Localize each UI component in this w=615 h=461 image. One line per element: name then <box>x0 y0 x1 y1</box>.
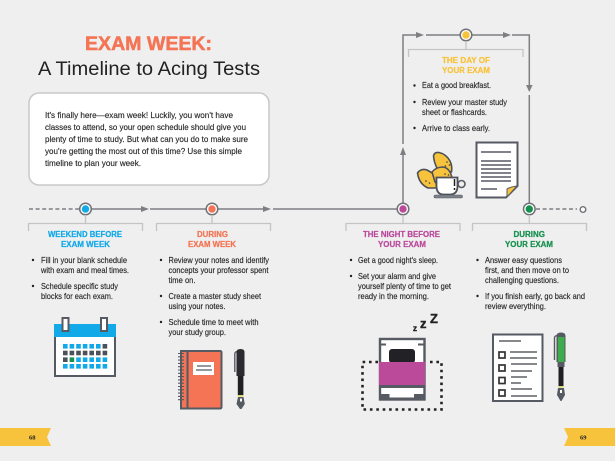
bullet list: Eat a good breakfast. <box>422 80 491 90</box>
snoring letters: z <box>420 316 427 331</box>
panel: introduction <box>29 93 269 185</box>
bullet list: Set your alarm and give <box>358 271 436 281</box>
arrow: top left <box>416 32 424 38</box>
icon: bed <box>362 311 442 410</box>
page tab: 68: 68 <box>29 434 36 442</box>
bullet list: your study group. <box>168 327 226 337</box>
heading: DURING <box>197 229 228 239</box>
bullet list: Review your master study <box>422 97 508 107</box>
heading: DURING <box>514 229 545 239</box>
heading <box>442 55 490 75</box>
page tab: 69: 69 <box>580 434 587 442</box>
panel: the night before your exam <box>346 215 460 410</box>
bullet list: yourself plenty of time to get <box>358 281 452 291</box>
bullet list: Arrive to class early. <box>422 123 490 133</box>
bullet list: ready in the morning. <box>358 291 429 301</box>
node: weekend before <box>80 203 91 215</box>
icon: checklist <box>493 334 542 401</box>
node: night before <box>397 203 409 215</box>
bullet list: time on. <box>168 275 196 285</box>
panel: during your exam <box>472 215 586 401</box>
node: during exam week <box>206 203 218 215</box>
heading <box>505 229 553 249</box>
icon: croissants and coffee <box>418 152 465 198</box>
heading: EXAM WEEK <box>61 239 111 249</box>
heading: EXAM WEEK <box>188 239 237 249</box>
heading <box>188 229 237 249</box>
icon: pen <box>235 349 245 409</box>
heading: YOUR EXAM <box>505 239 553 249</box>
bullet list: sheet or flashcards. <box>422 107 487 117</box>
title: A Timeline to Acing Tests <box>38 58 260 80</box>
bullet list: blocks for each exam. <box>41 291 113 301</box>
bullet list: concepts your professor spent <box>168 265 269 275</box>
page tab: 69 <box>564 428 615 446</box>
icon: green pen <box>554 332 566 401</box>
icon: notebook <box>178 351 222 408</box>
bullet list: If you finish early, go back and <box>485 291 585 301</box>
snoring letters <box>413 311 438 333</box>
bullet list: Schedule specific study <box>41 281 119 291</box>
node: day of exam <box>460 29 472 41</box>
bullet list: Review your notes and identify <box>168 255 270 265</box>
arrow: to during exam week <box>141 206 149 212</box>
heading: YOUR EXAM <box>378 239 426 249</box>
bullet list: Fill in your blank schedule <box>41 255 127 265</box>
snoring letters: Z <box>430 311 438 326</box>
panel: the day of your exam <box>408 41 523 198</box>
arrow: down to during exam <box>526 85 533 92</box>
bullet list <box>32 255 129 301</box>
arrow: up to day of exam <box>400 147 406 155</box>
arrow: top right <box>503 32 511 38</box>
panel: introduction: plenty of time to study. But what can you do to make sure <box>45 134 248 144</box>
bullet list <box>476 255 585 311</box>
panel: weekend before exam week <box>28 215 142 376</box>
bullet list <box>413 80 508 133</box>
bullet list: Create a master study sheet <box>168 291 262 301</box>
snoring letters: z <box>413 324 417 333</box>
bullet list: Schedule time to meet with <box>168 317 259 327</box>
node: end <box>580 207 586 212</box>
timeline <box>29 29 586 215</box>
arrow: to night before <box>263 206 271 212</box>
heading <box>48 229 122 249</box>
icon: calendar <box>54 318 116 376</box>
bullet list: first, and then move on to <box>485 265 569 275</box>
bullet list: challenging questions. <box>485 275 559 285</box>
bullet list <box>160 255 270 337</box>
panel: introduction: It's finally here—exam week! Luckily, you won't have <box>45 110 233 120</box>
panel: introduction: timeline to plan your week. <box>45 158 141 168</box>
icon: study sheet <box>476 142 518 198</box>
bullet list: review everything. <box>485 301 546 311</box>
panel: during exam week <box>156 215 270 409</box>
title <box>38 33 260 80</box>
heading: THE DAY OF <box>442 55 490 65</box>
heading <box>363 229 440 249</box>
title: EXAM WEEK: <box>85 33 212 55</box>
panel: introduction: you're getting the most out of this time? Use this simple <box>45 146 242 156</box>
bullet list <box>350 255 452 301</box>
node: during your exam <box>524 203 535 215</box>
panel: introduction: classes to attend, so your open schedule should give you <box>45 122 246 132</box>
bullet list: with exam and meal times. <box>40 265 129 275</box>
heading: WEEKEND BEFORE <box>48 229 122 239</box>
bullet list: Answer easy questions <box>485 255 562 265</box>
page tab: 68 <box>0 428 51 446</box>
bullet list: Get a good night's sleep. <box>358 255 438 265</box>
heading: YOUR EXAM <box>442 65 490 75</box>
bullet list: using your notes. <box>168 301 226 311</box>
heading: THE NIGHT BEFORE <box>363 229 440 239</box>
